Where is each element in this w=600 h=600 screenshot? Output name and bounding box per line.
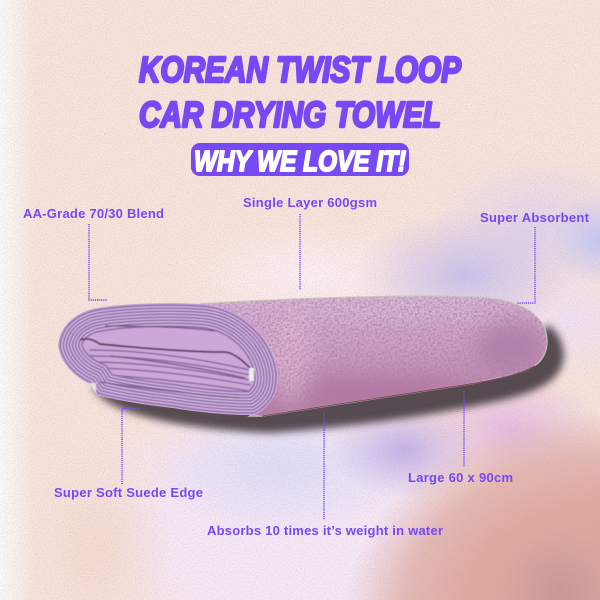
- label: Super Soft Suede Edge: Super Soft Suede Edge: [54, 485, 203, 500]
- label: AA-Grade 70/30 Blend: [23, 206, 164, 300]
- label: Super Absorbent: [480, 210, 590, 303]
- label: Single Layer 600gsm: [243, 195, 377, 290]
- label: AA-Grade 70/30 Blend: AA-Grade 70/30 Blend: [23, 206, 164, 221]
- towel folded end: [58, 303, 278, 415]
- towel: [58, 290, 560, 420]
- label: Single Layer 600gsm: Single Layer 600gsm: [243, 195, 377, 210]
- title: CAR DRYING TOWEL: [139, 94, 441, 135]
- title: KOREAN TWIST LOOP: [139, 49, 462, 90]
- label: Super Soft Suede Edge: [54, 408, 203, 500]
- inner fold gap: [80, 339, 250, 368]
- label: Large 60 x 90cm: Large 60 x 90cm: [408, 470, 513, 485]
- title: [139, 49, 462, 135]
- label: Super Absorbent: Super Absorbent: [480, 210, 590, 225]
- badge: why we love it: WHY WE LOVE IT!: [194, 146, 406, 178]
- label: Large 60 x 90cm: [408, 391, 513, 485]
- towel shadow: [92, 325, 564, 433]
- label: Absorbs 10 times it's weight in water: Absorbs 10 times it’s weight in water: [207, 523, 443, 538]
- towel flat body: [200, 290, 560, 420]
- inner layer stripes: [90, 350, 250, 397]
